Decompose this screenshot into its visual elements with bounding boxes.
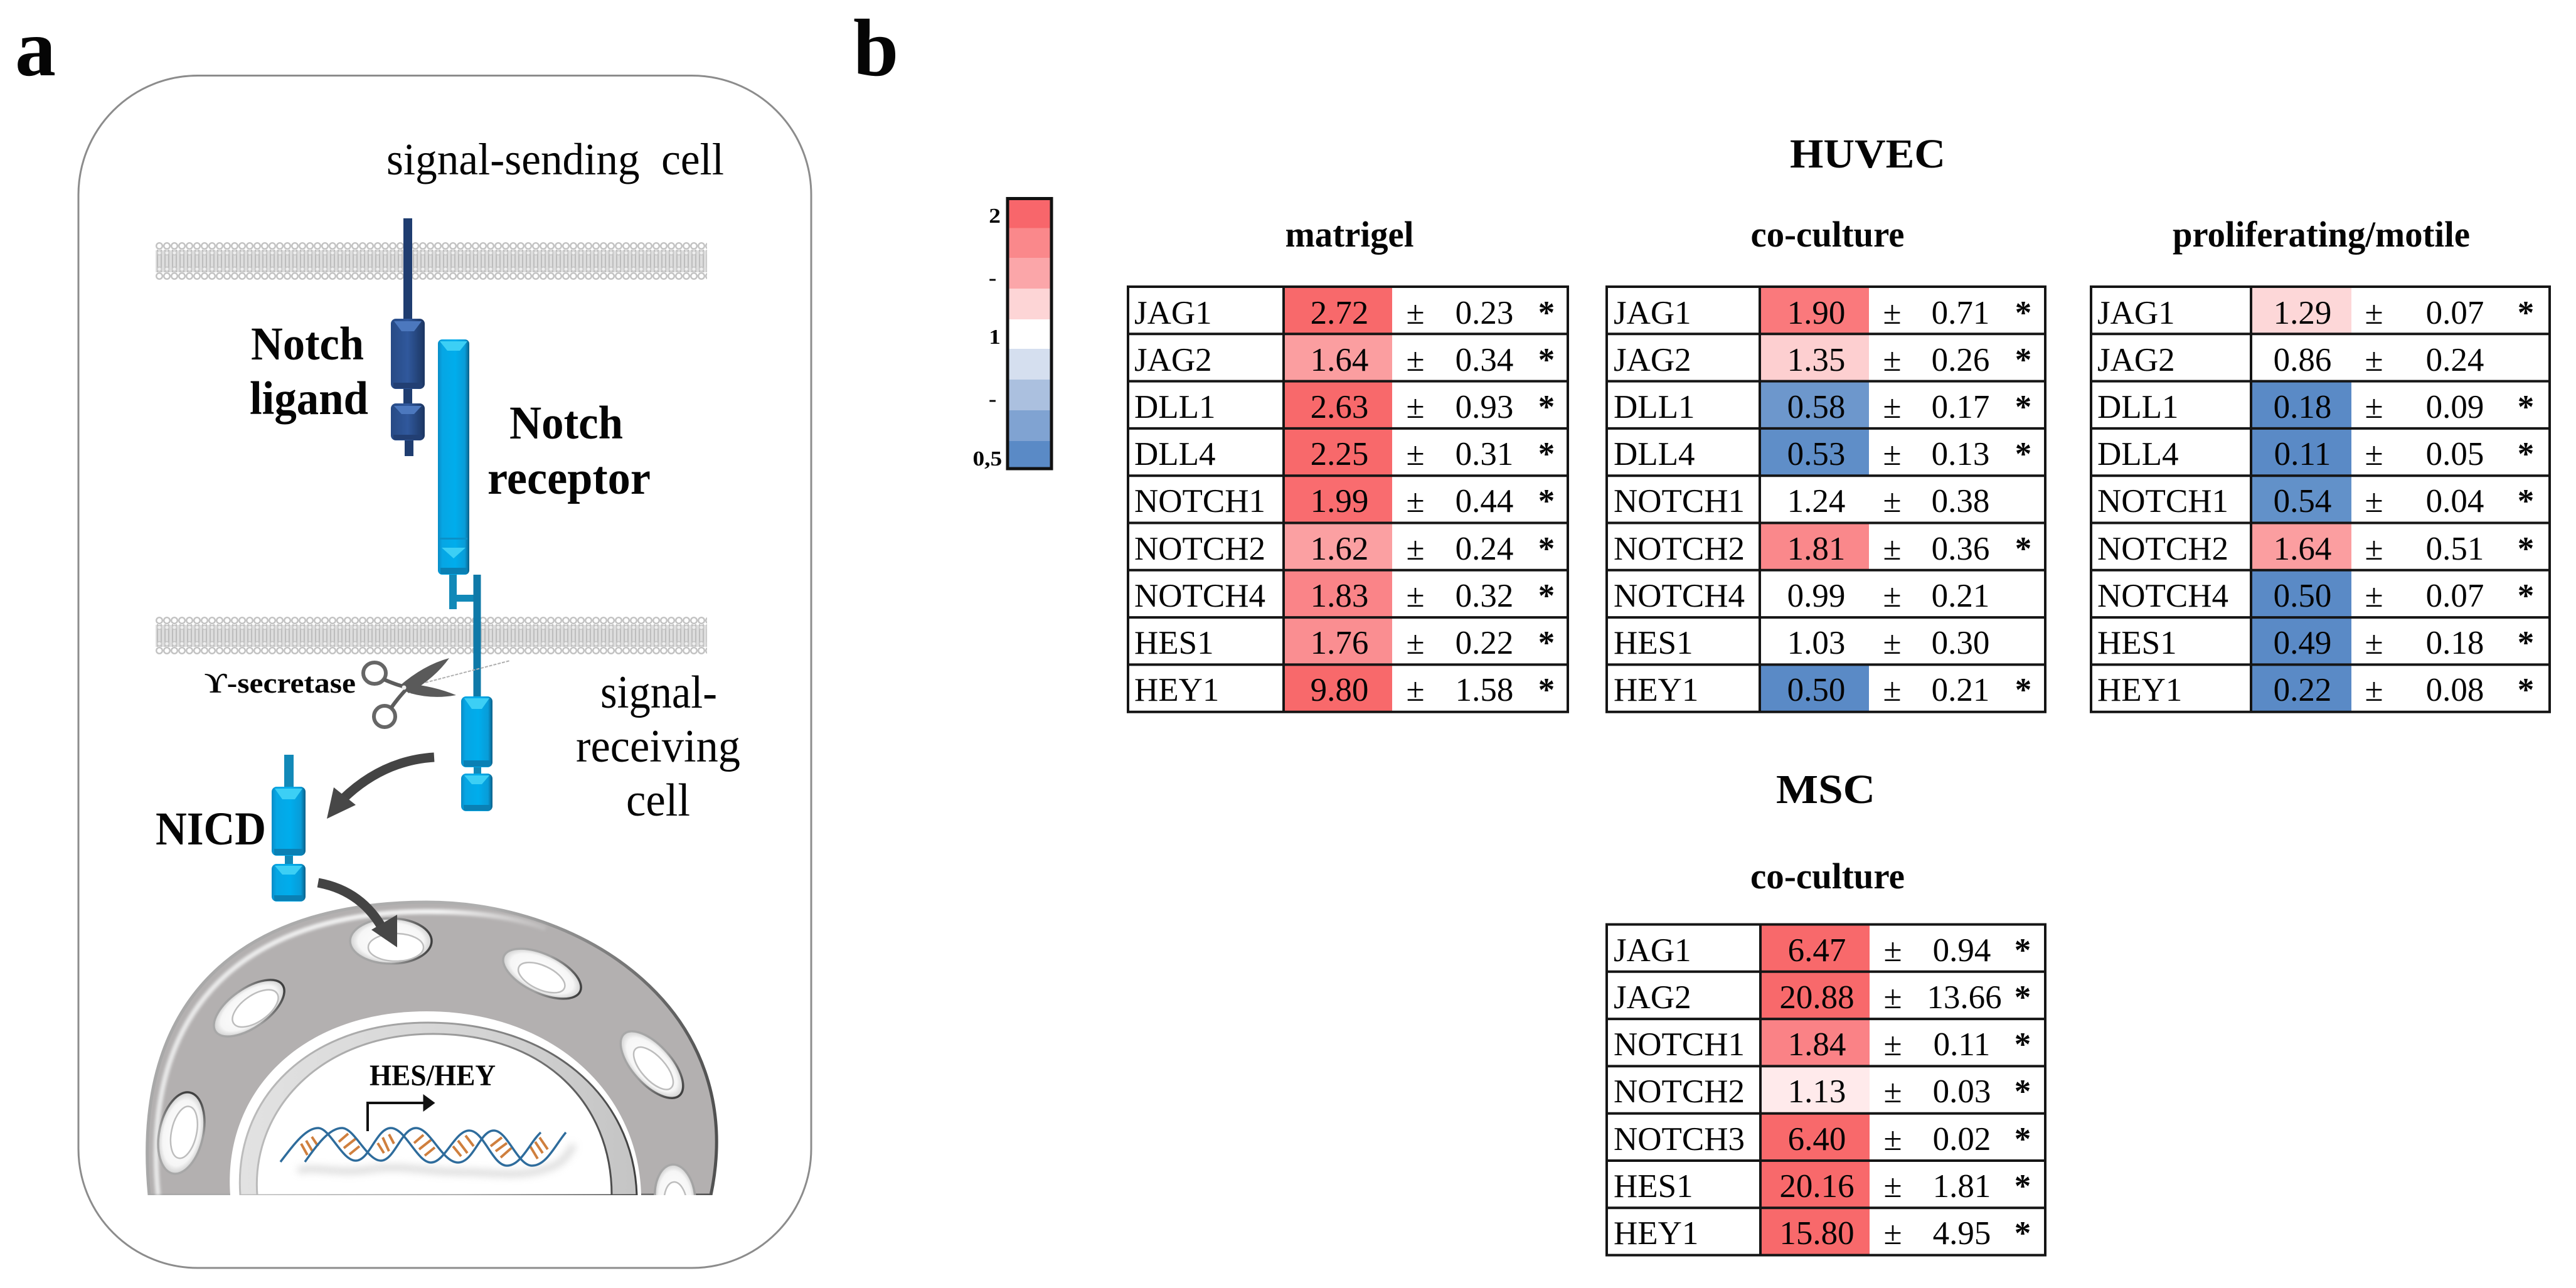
- row: HES1: HES1: [1134, 625, 1214, 661]
- row: DLL4: *: [2015, 436, 2031, 472]
- row: DLL4: 0.11: [2274, 436, 2331, 472]
- row: JAG2: 0.24: [2426, 342, 2484, 378]
- nuclear pore: right upper: [502, 947, 582, 1000]
- heading: MSC co-culture: co-culture: [1750, 856, 1905, 897]
- row: JAG1: [1614, 287, 2031, 334]
- row: JAG2: 0.86: [2274, 342, 2331, 378]
- row: NOTCH4: ±: [1883, 578, 1902, 614]
- row: DLL1: [1614, 381, 2031, 428]
- row: NOTCH4: NOTCH4: [2097, 578, 2228, 614]
- row: NOTCH3: 0.02: [1933, 1121, 1991, 1158]
- row: JAG2: [1614, 972, 2031, 1019]
- row: JAG1: 0.71: [1932, 295, 1989, 331]
- icon: Notch ligand protein: [391, 218, 425, 456]
- row: DLL4: 0.31: [1456, 436, 1513, 472]
- row: NOTCH3: [1614, 1114, 2031, 1161]
- row: JAG2: JAG2: [2097, 342, 2175, 378]
- row: NOTCH1: *: [2518, 483, 2534, 519]
- row: JAG2: [1134, 334, 1555, 381]
- row: DLL1: DLL1: [1134, 389, 1216, 425]
- row: NOTCH2: [1614, 1066, 2031, 1114]
- row: DLL1: ±: [2365, 389, 2383, 425]
- row: NOTCH4: 1.83: [1311, 578, 1368, 614]
- table: HUVEC co-culture: [1607, 287, 2045, 712]
- row: NOTCH4: 0.21: [1932, 578, 1989, 614]
- row: JAG1: JAG1: [1614, 932, 1691, 969]
- row: HES1: ±: [1883, 625, 1902, 661]
- row: NOTCH1: ±: [2365, 483, 2383, 519]
- row: DLL1: 2.63: [1311, 389, 1368, 425]
- row: JAG2: ±: [1883, 979, 1902, 1016]
- row: NOTCH2: ±: [1883, 531, 1902, 567]
- row: HEY1: HEY1: [1614, 1215, 1698, 1252]
- row: JAG1: *: [1538, 295, 1555, 331]
- row: JAG2: 1.35: [1787, 342, 1845, 378]
- row: JAG1: 0.07: [2426, 295, 2484, 331]
- row: NOTCH2: ±: [2365, 531, 2383, 567]
- row: DLL4: 0.05: [2426, 436, 2484, 472]
- row: DLL1: ±: [1406, 389, 1425, 425]
- row: HES1: HES1: [1614, 1168, 1693, 1205]
- row: JAG1: [1614, 925, 2031, 972]
- row: JAG1: 0.94: [1933, 932, 1991, 969]
- row: HES1: ±: [1883, 1168, 1902, 1205]
- upper cell membrane: [156, 242, 707, 280]
- row: JAG1: JAG1: [1614, 295, 1691, 331]
- row: NOTCH4: *: [2518, 578, 2534, 614]
- row: JAG2: *: [2015, 342, 2031, 378]
- row: HES1: ±: [2365, 625, 2383, 661]
- row: NOTCH4: [2097, 570, 2534, 617]
- row: HEY1: *: [1538, 672, 1555, 708]
- row: NOTCH1: 1.84: [1788, 1026, 1846, 1063]
- row: NOTCH1: ±: [1883, 483, 1902, 519]
- row: HEY1: 0.21: [1932, 672, 1989, 708]
- row: NOTCH1: NOTCH1: [2097, 483, 2228, 519]
- row: JAG1: 1.90: [1787, 295, 1845, 331]
- nuclear pore: left upper: [213, 979, 285, 1038]
- row: NOTCH4: [1614, 578, 1989, 614]
- row: HEY1: *: [2015, 672, 2031, 708]
- table: HUVEC matrigel: [1128, 287, 1568, 712]
- row: DLL1: 0.09: [2426, 389, 2484, 425]
- row: NOTCH2: *: [2015, 531, 2031, 567]
- row: DLL4: *: [2518, 436, 2534, 472]
- row: NOTCH1: [2097, 476, 2534, 523]
- row: HES1: *: [2518, 625, 2534, 661]
- row: NOTCH2: NOTCH2: [2097, 531, 2228, 567]
- nuclear pore: right lower: [654, 1163, 696, 1195]
- row: NOTCH2: NOTCH2: [1134, 531, 1265, 567]
- row: NOTCH2: 1.62: [1311, 531, 1368, 567]
- row: NOTCH2: 1.81: [1787, 531, 1845, 567]
- row: HEY1: HEY1: [2097, 672, 2182, 708]
- row: NOTCH1: ±: [1883, 1026, 1902, 1063]
- label: signal-receiving cell: cell: [626, 775, 690, 826]
- row: HES1: 0.49: [2274, 625, 2331, 661]
- row: NOTCH1: NOTCH1: [1134, 483, 1265, 519]
- row: JAG2: 20.88: [1779, 979, 1855, 1016]
- nuclear interior: [230, 1011, 641, 1195]
- row: JAG2: 13.66: [1927, 979, 2002, 1016]
- row: HEY1: ±: [1883, 672, 1902, 708]
- row: DLL1: *: [2015, 389, 2031, 425]
- label: NICD: NICD: [156, 803, 266, 855]
- legend tick labels: 1: [989, 325, 1001, 349]
- row: HEY1: *: [2518, 672, 2534, 708]
- row: DLL4: [1614, 428, 2031, 476]
- panel label a: a: [15, 3, 56, 93]
- heading: HUVEC: HUVEC: [1790, 131, 1945, 177]
- row: NOTCH4: 0.07: [2426, 578, 2484, 614]
- row: HEY1: 9.80: [1311, 672, 1368, 708]
- row: NOTCH1: 0.44: [1456, 483, 1513, 519]
- row: DLL1: DLL1: [1614, 389, 1695, 425]
- row: NOTCH2: 0.36: [1932, 531, 1989, 567]
- row: JAG2: JAG2: [1614, 342, 1691, 378]
- row: HEY1: *: [2014, 1215, 2031, 1252]
- label: signal-sending cell: signal-sending cell: [386, 134, 724, 184]
- icon: free NICD: [272, 755, 306, 902]
- arrow: transcription start: [368, 1096, 434, 1131]
- row: JAG1: ±: [1406, 295, 1425, 331]
- table: MSC co-culture: [1607, 925, 2045, 1255]
- row: NOTCH1: ±: [1406, 483, 1425, 519]
- row: HES1: 0.30: [1932, 625, 1989, 661]
- legend tick labels: -: [989, 387, 996, 411]
- row: DLL1: ±: [1883, 389, 1902, 425]
- row: JAG2: *: [2014, 979, 2031, 1016]
- label: signal-receiving cell: signal-: [600, 667, 717, 718]
- row: NOTCH1: 0.11: [1934, 1026, 1990, 1063]
- heading: matrigel: matrigel: [1285, 214, 1414, 255]
- row: DLL1: 0.58: [1787, 389, 1845, 425]
- row: HES1: *: [2014, 1168, 2031, 1205]
- row: NOTCH2: *: [1538, 531, 1555, 567]
- row: JAG1: *: [2015, 295, 2031, 331]
- row: DLL1: *: [1538, 389, 1555, 425]
- row: HEY1: 15.80: [1779, 1215, 1855, 1252]
- label: HES/HEY: HES/HEY: [370, 1059, 496, 1092]
- row: NOTCH1: [1134, 476, 1555, 523]
- icon: Notch receptor protein: [438, 339, 481, 697]
- legend tick labels: -: [989, 266, 996, 290]
- row: HEY1: [1134, 664, 1555, 712]
- row: JAG2: ±: [2365, 342, 2383, 378]
- row: HES1: [1614, 1161, 2031, 1208]
- row: DLL1: 0.17: [1932, 389, 1989, 425]
- icon: cleaved NICD fragment: [461, 696, 492, 811]
- row: DLL1: *: [2518, 389, 2534, 425]
- row: HES1: 1.03: [1787, 625, 1845, 661]
- heading: proliferating/motile: proliferating/motile: [2173, 214, 2470, 255]
- row: NOTCH1: *: [2014, 1026, 2031, 1063]
- row: HEY1: [2097, 664, 2534, 712]
- row: HEY1: [1614, 1208, 2031, 1255]
- row: JAG2: [1614, 334, 2031, 381]
- row: JAG2: *: [1538, 342, 1555, 378]
- row: JAG2: ±: [1883, 342, 1902, 378]
- lower cell membrane: [156, 616, 707, 655]
- row: HEY1: HEY1: [1614, 672, 1698, 708]
- row: DLL4: DLL4: [2097, 436, 2179, 472]
- row: HEY1: ±: [1883, 1215, 1902, 1252]
- row: HES1: 20.16: [1779, 1168, 1855, 1205]
- heading: co-culture: co-culture: [1750, 214, 1905, 255]
- row: NOTCH4: NOTCH4: [1134, 578, 1265, 614]
- row: NOTCH1: 0.38: [1932, 483, 1989, 519]
- row: JAG1: JAG1: [2097, 295, 2175, 331]
- row: JAG2: 0.26: [1932, 342, 1989, 378]
- row: NOTCH2: *: [2014, 1073, 2031, 1110]
- row: HEY1: 0.08: [2426, 672, 2484, 708]
- legend tick labels: [972, 204, 1002, 471]
- row: NOTCH2: 1.64: [2274, 531, 2331, 567]
- row: NOTCH4: 0.99: [1787, 578, 1845, 614]
- row: JAG1: 0.23: [1456, 295, 1513, 331]
- row: DLL4: ±: [2365, 436, 2383, 472]
- row: NOTCH2: *: [2518, 531, 2534, 567]
- row: JAG2: [2097, 342, 2484, 378]
- legend tick labels: 2: [989, 204, 1001, 228]
- row: NOTCH4: ±: [1406, 578, 1425, 614]
- row: JAG2: ±: [1406, 342, 1425, 378]
- nuclear pore: right middle: [620, 1030, 684, 1099]
- arrow: release of NICD: [327, 757, 434, 819]
- row: DLL4: 0.53: [1787, 436, 1845, 472]
- icon: nucleus: [146, 901, 718, 1195]
- row: NOTCH2: ±: [1406, 531, 1425, 567]
- label: gamma secretase: ϒ-secretase: [205, 667, 356, 699]
- heading: MSC: MSC: [1776, 767, 1875, 812]
- row: HEY1: 0.50: [1787, 672, 1845, 708]
- panel b: expression tables: [972, 131, 2550, 1255]
- row: HES1: [1614, 625, 1989, 661]
- nuclear envelope: [147, 902, 716, 1195]
- row: HEY1: ±: [1406, 672, 1425, 708]
- row: HES1: 0.18: [2426, 625, 2484, 661]
- row: HES1: HES1: [1614, 625, 1693, 661]
- row: NOTCH2: ±: [1883, 1073, 1902, 1110]
- row: JAG1: ±: [2365, 295, 2383, 331]
- row: NOTCH2: 0.24: [1456, 531, 1513, 567]
- row: HES1: 0.22: [1456, 625, 1513, 661]
- rounded cell frame: [78, 75, 811, 1268]
- row: DLL1: [2097, 381, 2534, 428]
- row: NOTCH2: [1134, 523, 1555, 570]
- row: NOTCH1: NOTCH1: [1614, 1026, 1745, 1063]
- row: DLL4: [2097, 428, 2534, 476]
- row: DLL4: 0.13: [1932, 436, 1989, 472]
- row: DLL1: 0.18: [2274, 389, 2331, 425]
- row: JAG1: ±: [1883, 932, 1902, 969]
- panel label b: b: [853, 3, 898, 93]
- colour scale legend: [972, 198, 1051, 471]
- row: JAG1: *: [2518, 295, 2534, 331]
- row: NOTCH2: 0.03: [1933, 1073, 1991, 1110]
- label: Notch receptor: [487, 397, 651, 504]
- row: JAG1: [1134, 287, 1555, 334]
- row: NOTCH2: 0.51: [2426, 531, 2484, 567]
- row: NOTCH1: 1.24: [1787, 483, 1845, 519]
- row: NOTCH1: 0.54: [2274, 483, 2331, 519]
- row: JAG1: *: [2014, 932, 2031, 969]
- panel a: Notch signalling diagram: [78, 75, 811, 1268]
- row: JAG2: JAG2: [1614, 979, 1691, 1016]
- row: NOTCH4: ±: [2365, 578, 2383, 614]
- row: NOTCH3: 6.40: [1788, 1121, 1846, 1158]
- row: JAG2: JAG2: [1134, 342, 1212, 378]
- label: Notch ligand: Notch: [251, 318, 364, 370]
- row: HES1: [2097, 617, 2534, 664]
- row: NOTCH3: *: [2014, 1121, 2031, 1158]
- row: DLL4: 2.25: [1311, 436, 1368, 472]
- row: HES1: *: [1538, 625, 1555, 661]
- row: NOTCH1: 0.04: [2426, 483, 2484, 519]
- row: DLL1: 0.93: [1456, 389, 1513, 425]
- row: NOTCH2: [2097, 523, 2534, 570]
- row: DLL1: [1134, 381, 1555, 428]
- row: HEY1: 4.95: [1933, 1215, 1991, 1252]
- row: DLL4: DLL4: [1614, 436, 1695, 472]
- row: DLL4: ±: [1883, 436, 1902, 472]
- row: JAG2: 0.34: [1456, 342, 1513, 378]
- row: NOTCH4: [1134, 570, 1555, 617]
- row: JAG2: 1.64: [1311, 342, 1368, 378]
- row: NOTCH2: [1614, 523, 2031, 570]
- label: Notch ligand: ligand: [250, 373, 368, 425]
- row: JAG1: 1.29: [2274, 295, 2331, 331]
- row: JAG1: [2097, 287, 2534, 334]
- row: DLL4: DLL4: [1134, 436, 1216, 472]
- row: NOTCH3: NOTCH3: [1614, 1121, 1745, 1158]
- row: DLL4: [1134, 428, 1555, 476]
- row: JAG1: 6.47: [1788, 932, 1846, 969]
- row: NOTCH1: [1614, 483, 1989, 519]
- label: Notch receptor: receptor: [487, 452, 651, 504]
- row: HES1: 1.81: [1933, 1168, 1991, 1205]
- row: DLL4: ±: [1406, 436, 1425, 472]
- row: HEY1: [1614, 664, 2031, 712]
- row: NOTCH3: ±: [1883, 1121, 1902, 1158]
- row: NOTCH4: 0.32: [1456, 578, 1513, 614]
- row: NOTCH4: *: [1538, 578, 1555, 614]
- row: NOTCH2: 1.13: [1788, 1073, 1846, 1110]
- label: signal-receiving cell: receiving: [576, 721, 740, 772]
- row: DLL1: DLL1: [2097, 389, 2179, 425]
- row: JAG1: 2.72: [1311, 295, 1368, 331]
- row: HES1: HES1: [2097, 625, 2177, 661]
- row: HES1: [1134, 617, 1555, 664]
- row: NOTCH1: NOTCH1: [1614, 483, 1745, 519]
- row: HES1: ±: [1406, 625, 1425, 661]
- row: NOTCH1: 1.99: [1311, 483, 1368, 519]
- row: HEY1: HEY1: [1134, 672, 1219, 708]
- icon: scissors: [363, 658, 510, 727]
- row: HES1: 1.76: [1311, 625, 1368, 661]
- label: Notch ligand: [250, 318, 368, 425]
- row: HEY1: 1.58: [1456, 672, 1513, 708]
- row: DLL4: *: [1538, 436, 1555, 472]
- icon: DNA double helix: [280, 1128, 574, 1174]
- row: JAG1: JAG1: [1134, 295, 1212, 331]
- legend tick labels: 0,5: [972, 447, 1002, 471]
- label: Notch receptor: Notch: [509, 397, 623, 449]
- row: NOTCH1: [1614, 1019, 2031, 1066]
- nuclear pore: top: [350, 918, 432, 964]
- label: signal-receiving cell: [576, 667, 740, 826]
- row: NOTCH4: 0.50: [2274, 578, 2331, 614]
- row: JAG1: ±: [1883, 295, 1902, 331]
- row: NOTCH4: NOTCH4: [1614, 578, 1745, 614]
- row: HEY1: 0.22: [2274, 672, 2331, 708]
- row: NOTCH1: *: [1538, 483, 1555, 519]
- row: NOTCH2: NOTCH2: [1614, 1073, 1745, 1110]
- row: NOTCH2: NOTCH2: [1614, 531, 1745, 567]
- arrow: NICD into nucleus: [318, 883, 397, 947]
- table: HUVEC proliferating/motile: [2091, 287, 2550, 712]
- row: HEY1: ±: [2365, 672, 2383, 708]
- nuclear pore: left lower: [157, 1091, 206, 1174]
